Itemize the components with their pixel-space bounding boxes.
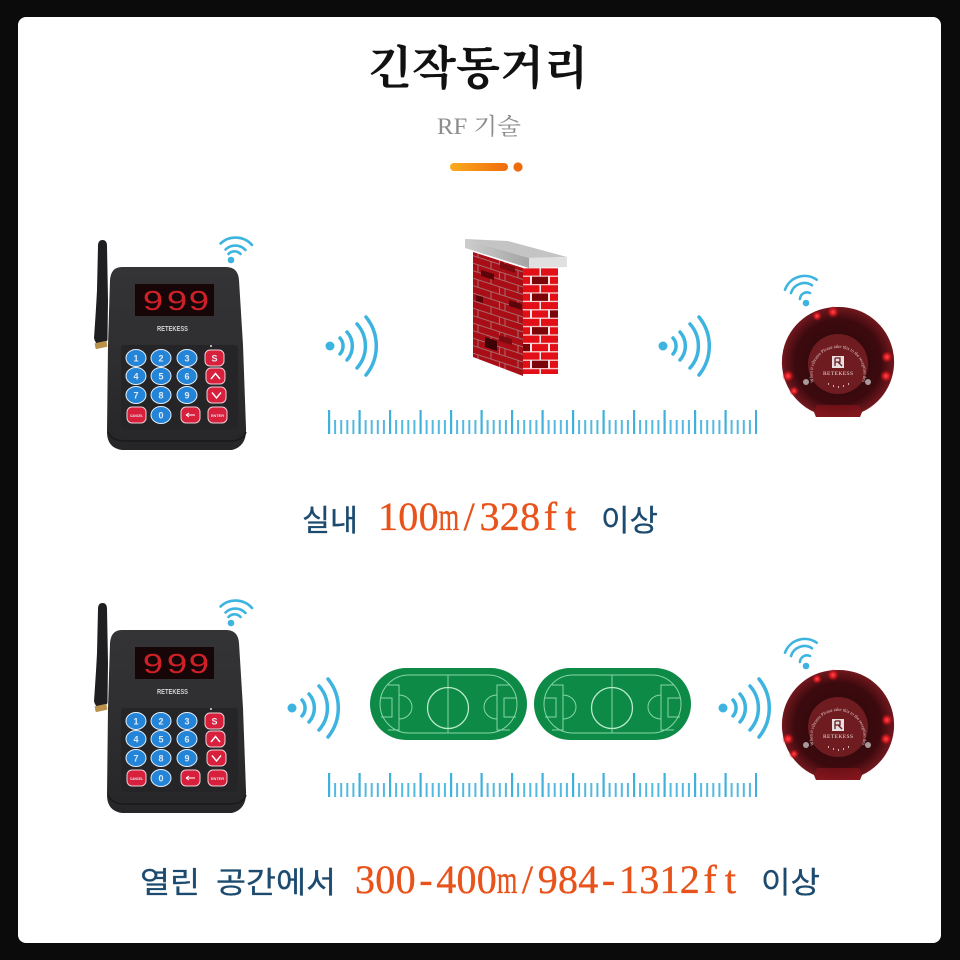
football pitch 2 [534,668,691,740]
keypad: 2 [158,716,164,726]
icon: signal waves right of wall [658,317,709,375]
distance ruler: indoor [328,410,757,434]
wall cap [465,239,567,268]
antenna [94,240,108,349]
keypad: 3 [184,716,190,726]
pager receiver: outdoor row [782,669,894,780]
indoor range caption: /328ft [464,494,576,539]
pager receiver: indoor row [782,306,894,417]
outdoor range caption: 공간에서 [216,867,336,900]
icon: signal waves left of pitches [288,679,338,737]
keypad: 9 [184,390,190,400]
outdoor range caption: /984-1312ft [522,857,736,902]
icon: signal waves right of pitches [718,679,769,737]
keypad: S [211,354,218,364]
indoor range caption: m [439,496,459,539]
outdoor range caption: 이상 [761,867,820,900]
heading accent [450,162,523,172]
receiver hub: RETEKESS [823,371,853,377]
icon: signal waves left of wall [326,317,376,375]
device body [107,630,246,813]
keypad: 4 [133,734,139,744]
keypad: 2 [158,354,164,364]
receiver hub: When it vibrates Please take this to the reception desk [810,708,866,746]
indoor range caption: 실내 [302,505,358,538]
keypad: 8 [158,754,164,764]
title: 긴작동거리 [368,43,588,94]
receiver hub [808,697,868,757]
device body [107,267,246,450]
icon: wifi on outdoor receiver [785,639,817,669]
outdoor range caption: 열린 [140,867,200,900]
antenna [94,603,108,712]
dark bricks on right face [523,277,558,368]
dark bricks on left face [476,262,522,351]
keypad: 3 [184,354,190,364]
keypad: 1 [133,716,139,726]
keypad: 7 [133,390,139,400]
keypad: S [211,716,218,726]
keypad [121,345,238,429]
keypad: 0 [158,410,164,420]
transmitter device: indoor row [94,240,246,450]
icon: wifi on transmitter [220,238,252,263]
keypad [121,708,238,792]
keypad: 8 [158,390,164,400]
receiver hub: RETEKESS [823,734,853,740]
subtitle: RF 기술 [437,114,521,139]
keypad: 0 [158,774,164,784]
keypad: ENTER [211,776,224,781]
icon: wifi on receiver [785,276,817,306]
distance ruler: outdoor [328,773,757,797]
keypad: CANCEL [130,413,143,418]
outdoor range caption [140,857,820,902]
keypad: 5 [158,372,164,382]
keypad: 6 [184,372,190,382]
football pitch 1 [370,668,527,740]
brand logo: RETEKESS [157,689,188,696]
indoor range caption: 100 [378,494,439,539]
LED display: 999 [143,285,209,316]
keypad: 4 [133,372,139,382]
LED display: 999 [143,648,209,679]
outdoor range caption: m [497,859,517,902]
indoor range caption [302,494,658,539]
keypad: 5 [158,734,164,744]
receiver hub: When it vibrates Please take this to the reception desk [810,344,866,383]
keypad: ENTER [211,413,224,418]
transmitter device: outdoor row [94,603,246,813]
icon: wifi on outdoor transmitter [220,601,252,626]
icon: brick wall [465,239,567,376]
keypad: 9 [184,754,190,764]
brand logo: RETEKESS [157,326,188,333]
indoor range caption: 이상 [601,505,658,538]
receiver hub [808,334,868,394]
outdoor range caption: 300-400 [355,857,497,902]
keypad: 6 [184,734,190,744]
keypad: CANCEL [130,776,143,781]
keypad: 1 [133,354,139,364]
keypad: 7 [133,754,139,764]
